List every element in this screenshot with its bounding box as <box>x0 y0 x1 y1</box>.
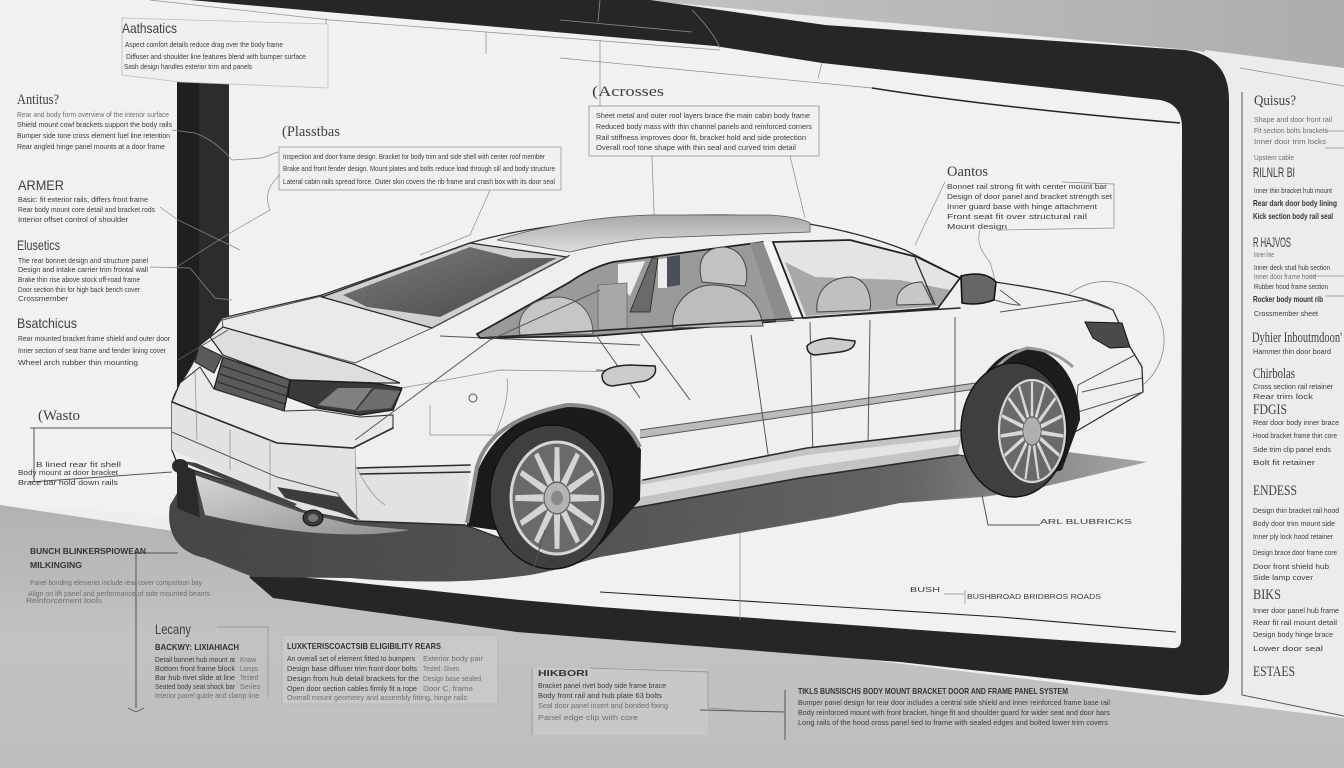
side mirror <box>961 274 996 304</box>
right column block 7: Side lamp cover <box>1253 573 1314 582</box>
b pillar strip <box>750 242 793 322</box>
text block: left label 1 <box>17 92 172 151</box>
text block: left label 1: Shield mount cowl brackets support the body rails <box>17 120 172 129</box>
panel: bottom note 1: Series <box>240 682 260 691</box>
panel: top centre note <box>589 84 819 156</box>
panel: right centre note: Mount design <box>947 222 1007 231</box>
text block: left label 4 <box>17 315 170 367</box>
panel: centre left note: Lateral cabin rails spread force. Outer skin covers the rib frame and crash box with its door seal <box>283 177 555 186</box>
left frame post <box>177 82 229 512</box>
text block: bottom left heading: BUNCH BLINKERSPIOWEAN <box>30 546 146 556</box>
text block: bottom left heading <box>26 546 210 712</box>
panel: bottom note 1: Know <box>240 655 256 664</box>
grille <box>214 357 290 411</box>
panel: bottom note 3: Seal door panel insert and bonded fixing <box>538 701 668 710</box>
fuel door and rear quarter lines <box>402 255 640 435</box>
right column block 8: BIKS <box>1253 587 1281 603</box>
front window <box>773 240 960 318</box>
panel: bottom note 3: Panel edge clip with core <box>538 713 638 722</box>
panel: top left note <box>122 18 328 88</box>
window white gaps <box>618 258 667 296</box>
right column block 7 <box>1253 483 1339 582</box>
right column block 6: Side trim clip panel ends <box>1253 445 1331 454</box>
top right grey backdrop <box>640 0 1344 70</box>
car body shell <box>172 215 1143 560</box>
right column block 7: ENDESS <box>1253 483 1297 499</box>
text block: bottom left heading: Panel bonding elements include rear cover comparison bay <box>30 578 202 587</box>
panel: centre left note <box>279 124 561 190</box>
panel: bottom note 3: Bracket panel rivet body side frame brace <box>538 681 666 690</box>
panel: bottom note 1: Bar hub rivet slide at line <box>155 673 235 682</box>
callout: left lower label with bracket: (Wasto <box>38 408 80 424</box>
text block: left label 1: Antitus? <box>17 92 59 108</box>
panel: bottom note 4: Bumper panel design for rear door includes a central side shield and inner reinforced frame base rail <box>798 698 1110 707</box>
right column block 6: Rear door body inner brace <box>1253 418 1339 427</box>
panel: bottom note 2: Exterior body pair <box>423 654 484 663</box>
leader lines <box>150 130 995 300</box>
text block: left label 4: Bsatchicus <box>17 315 77 331</box>
main tail lamp <box>288 380 402 415</box>
panel: bottom note 3: HIKBORI <box>538 668 588 678</box>
ground shadow <box>169 440 1147 582</box>
right column block 1 <box>1254 93 1332 162</box>
text block: bottom left heading: MILKINGING <box>30 560 82 570</box>
right column block 3: Rubber hood frame section <box>1254 282 1328 291</box>
panel: bottom note 1: Lecany <box>155 621 191 637</box>
panel: bottom note 1: Detail bonnet hub mount at <box>155 655 236 664</box>
panel: right centre note <box>947 164 1114 231</box>
text block: bottom left heading: Reinforcement tools <box>26 596 102 605</box>
panel: top left note: Sash design handles exterior trim and panels <box>124 62 252 71</box>
spoiler lip <box>210 327 400 383</box>
small tail lamp <box>195 345 222 373</box>
right column block 4: Hammer thin door board <box>1253 347 1331 356</box>
rear wheel arch <box>467 404 641 545</box>
right column block 6: FDGIS <box>1253 402 1287 418</box>
text block: left label 3: Design and intake carrier trim frontal wall <box>18 265 148 274</box>
trunk lid <box>222 296 432 363</box>
right column block 3: Inner line <box>1254 250 1274 259</box>
text block: bottom screen caption: BUSH <box>910 585 940 594</box>
right column block 2: RILNLR BI <box>1253 164 1295 180</box>
panel: top left note: Aathsatics <box>122 20 177 36</box>
right column block 5 <box>1253 366 1333 401</box>
screen and top paper strip <box>0 0 1182 648</box>
front wheel <box>961 363 1067 497</box>
rear glass <box>322 243 567 328</box>
door seams and body creases <box>480 308 983 508</box>
text block: left label 2: ARMER <box>18 177 64 193</box>
car illustration <box>172 215 1164 570</box>
panel: bottom note 2: Design base diffuser trim front door bolts <box>287 664 417 673</box>
hood and front end lines <box>995 281 1164 432</box>
panel: bottom note 3 <box>532 668 735 735</box>
text block: left label 3 <box>17 237 148 303</box>
rear bumper lines <box>172 367 470 525</box>
text block: left label 3: Door section thin for high back bench cover <box>18 285 140 294</box>
text block: left label 3: The rear bonnet design and structure panel <box>18 256 148 265</box>
text block: left label 4: Inner section of seat frame and fender lining cover <box>18 346 166 355</box>
car overlay construction lines <box>178 290 600 570</box>
text block: left label 3: Crossmember <box>18 294 69 303</box>
text block: left label 3: Brake thin rise above stock off-road frame <box>18 275 140 284</box>
panel: right centre note: Front seat fit over structural rail <box>947 212 1087 221</box>
text block: left label 4: Wheel arch rubber thin mounting <box>18 358 138 367</box>
right column block 8: Design body hinge brace <box>1253 630 1333 639</box>
right column block 3 <box>1253 234 1330 318</box>
callout: left lower label with bracket: Brace bar hold down rails <box>18 478 118 487</box>
roof panel <box>497 215 810 252</box>
panel: centre left note: Brake and front fender design. Mount plates and bolts reduce load through sill and body structure <box>283 164 555 173</box>
right column block 8: Lower door seal <box>1253 644 1323 653</box>
panel: bottom note 1: Bottom front frame block <box>155 664 235 673</box>
text block: left label 3: Elusetics <box>17 237 60 253</box>
front wheel arch <box>963 348 1080 490</box>
panel: bottom note 4: TIKLS BUNSISCHS BODY MOUNT BRACKET DOOR AND FRAME PANEL SYSTEM <box>798 686 1068 696</box>
panel: top left note: Aspect comfort details reduce drag over the body frame <box>125 40 283 49</box>
panel: centre left note: Inspection and door frame design. Bracket for body trim and side shell with center roof member <box>283 152 545 161</box>
right column block 9: ESTAES <box>1253 664 1295 680</box>
right column block 3: Inner deck stud hub section <box>1254 263 1330 272</box>
exhaust <box>172 459 323 526</box>
text block: left label 1: Bumper side tone cross element fuel line retention <box>17 131 170 140</box>
text block: bottom screen caption <box>910 585 1101 604</box>
right column block 1: Upstem cable <box>1254 153 1294 162</box>
right column block 1: Quisus? <box>1254 93 1296 109</box>
panel: top left note: Diffuser and shoulder line features blend with bumper surface <box>126 52 306 61</box>
panel: bottom note 3: Body front rail and hub plate 63 bolts <box>538 691 662 700</box>
callout: left lower label with bracket <box>18 408 172 487</box>
black tablet frame <box>190 0 1229 695</box>
bottom grey backdrop <box>0 505 1344 768</box>
panel: right centre note: Oantos <box>947 164 988 180</box>
right column block 4 <box>1252 330 1342 356</box>
panel: bottom note 2: LUXKTERISCOACTSIB ELIGIBILITY REARS <box>287 641 441 651</box>
text block: left label 2: Interior offset control of shoulder <box>18 215 129 224</box>
panel: top centre note: (Acrosses <box>592 84 664 100</box>
panel: top centre note: Reduced body mass with thin channel panels and reinforced corners <box>596 122 812 131</box>
door pillar <box>630 258 658 312</box>
text block: left label 2 <box>18 177 155 224</box>
panel: bottom note 2 <box>282 635 498 704</box>
right column block 1: Shape and door front rail <box>1254 115 1332 124</box>
rear wheel <box>490 425 614 569</box>
text block: left label 2: Basic: fit exterior rails, differs front frame <box>18 195 148 204</box>
panel: right centre note: Bonnet rail strong fit with center mount bar <box>947 182 1108 191</box>
side windows <box>477 240 960 338</box>
panel: bottom note 1 <box>155 621 268 700</box>
panel: top centre note: Sheet metal and outer roof layers brace the main cabin body frame <box>596 111 810 120</box>
callout: left lower label with bracket: B lined rear fit shell <box>36 460 121 469</box>
panel: bottom note 1: BACKWY: LIXIAHIACH <box>155 642 239 652</box>
text block: under car label <box>982 495 1132 526</box>
screen edge lines <box>150 0 1180 632</box>
panel: bottom note 2: Overall mount geometry and assembly fitting, hinge rails <box>287 693 467 702</box>
text block: bottom left heading: Align on lift panel and performance of side mounted beams <box>28 589 210 598</box>
right column block 8: Rear fit rail mount detail <box>1253 618 1337 627</box>
panel: bottom note 1: Lamps <box>240 664 258 673</box>
panel: bottom note 2: Tested: Given <box>423 664 459 673</box>
panel: right side column <box>1240 68 1344 716</box>
front seat <box>673 285 763 328</box>
panel: bottom note 4: Body reinforced mount with front bracket, hinge fit and shoulder guard for wider seat and door bars <box>798 708 1110 717</box>
right column block 8 <box>1253 587 1339 653</box>
right column block 3: Crossmember sheet <box>1254 309 1319 318</box>
panel: bottom note 4 <box>700 686 1110 740</box>
right column block 5: Chirbolas <box>1253 366 1295 382</box>
panel: right centre note: Design of door panel and bracket strength set <box>947 192 1113 201</box>
right column block 6: Bolt fit retainer <box>1253 458 1316 467</box>
text block: left label 1: Rear and body form overview of the interior surface <box>17 110 169 119</box>
right column block 6 <box>1253 402 1339 467</box>
right column block 3: Rocker body mount rib <box>1253 294 1323 304</box>
text block: bottom screen caption: BUSHBROAD BRIDBROS ROADS <box>967 592 1101 601</box>
panel: bottom note 1: Interior panel guide and clamp line <box>155 691 259 700</box>
door handles <box>602 338 855 386</box>
right column block 2 <box>1253 164 1337 221</box>
right column block 7: Body door trim mount side <box>1253 519 1335 528</box>
panel: bottom note 4: Long rails of the hood cross panel tied to frame with sealed edges and bolted lower trim covers <box>798 718 1108 727</box>
callout: left lower label with bracket: Body mount at door bracket <box>18 468 119 477</box>
text block: left label 2: Rear body mount core detail and bracket rods <box>18 205 155 214</box>
panel: bottom note 1: Seated body seat shock bar <box>155 682 235 691</box>
panel: bottom note 2: An overall set of element fitted to bumpers <box>287 654 415 663</box>
panel: bottom note 2: Door C, frame <box>423 684 473 693</box>
right column block 3: Inner door frame hood <box>1254 272 1316 281</box>
right column block 7: Inner ply lock hood retainer <box>1253 532 1333 541</box>
text block: under car label: ARL BLUBRICKS <box>1040 517 1132 526</box>
panel: right centre note: Inner guard base with hinge attachment <box>947 202 1098 211</box>
rear seat <box>519 297 593 335</box>
right column block 1: Fit section bolts brackets <box>1254 126 1328 135</box>
right column block 5: Rear trim lock <box>1253 392 1313 401</box>
right column block 7: Door front shield hub <box>1253 562 1329 571</box>
right column block 1: Inner door trim locks <box>1254 137 1326 146</box>
right column block 8: Inner door panel hub frame <box>1253 606 1339 615</box>
rear side window glass <box>477 242 793 338</box>
panel: top centre note: Overall roof tone shape with thin seal and curved trim detail <box>596 143 796 152</box>
right column block 3: R HAJVOS <box>1253 234 1291 250</box>
headlight <box>1085 322 1130 348</box>
panel: bottom note 2: Design from hub detail brackets for the <box>287 674 419 683</box>
text block: left label 1: Rear angled hinge panel mounts at a door frame <box>17 142 165 151</box>
panel: bottom note 1: Tested <box>240 673 258 682</box>
right column block 5: Cross section rail retainer <box>1253 382 1333 391</box>
panel: bottom note 2: Open door section cables firmly fit a rope <box>287 684 417 693</box>
panel: centre left note: (Plasstbas <box>282 124 340 140</box>
right paper panel <box>1195 50 1344 718</box>
panel: bottom note 2: Design base sealed <box>423 674 481 683</box>
panel: top centre note: Rail stiffness improves door fit, bracket hold and side protection <box>596 133 806 142</box>
text block: left label 4: Rear mounted bracket frame shield and outer door <box>18 334 170 343</box>
